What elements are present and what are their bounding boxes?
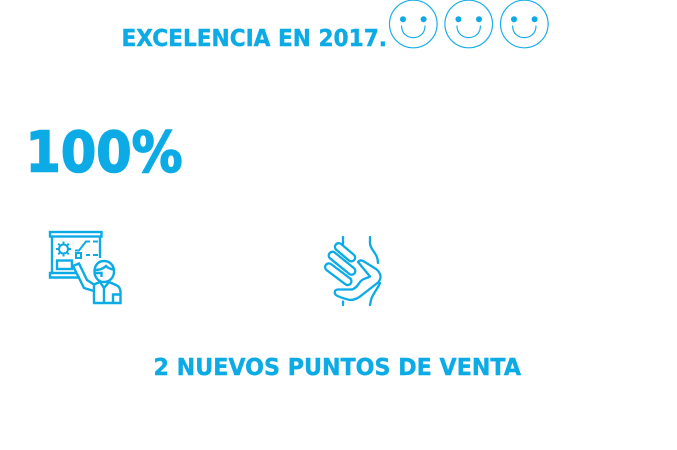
icon: smiley 3	[500, 0, 548, 48]
screen box	[57, 260, 72, 269]
statistic: 100%: 100%	[26, 120, 182, 186]
presenter arm and body	[73, 264, 120, 303]
board body	[52, 236, 100, 273]
board top rail	[50, 232, 102, 236]
board bottom rail	[50, 273, 102, 278]
supporting hand	[335, 260, 380, 300]
flow lines	[75, 242, 98, 255]
icon: smiley 1	[390, 0, 437, 48]
icons: three smiley faces	[390, 0, 548, 48]
wrist lines	[343, 237, 380, 305]
icon: presenter at board	[50, 232, 120, 303]
presenter head	[94, 261, 114, 282]
icon: clasped hands	[324, 237, 380, 305]
gear	[59, 244, 68, 254]
fingers	[333, 242, 357, 263]
heading: excelencia en 2017: EXCELENCIA EN 2017.	[122, 26, 387, 52]
icon: smiley 2	[445, 0, 492, 48]
heading: 2 nuevos puntos de venta: 2 NUEVOS PUNTOS DE VENTA	[154, 355, 521, 381]
